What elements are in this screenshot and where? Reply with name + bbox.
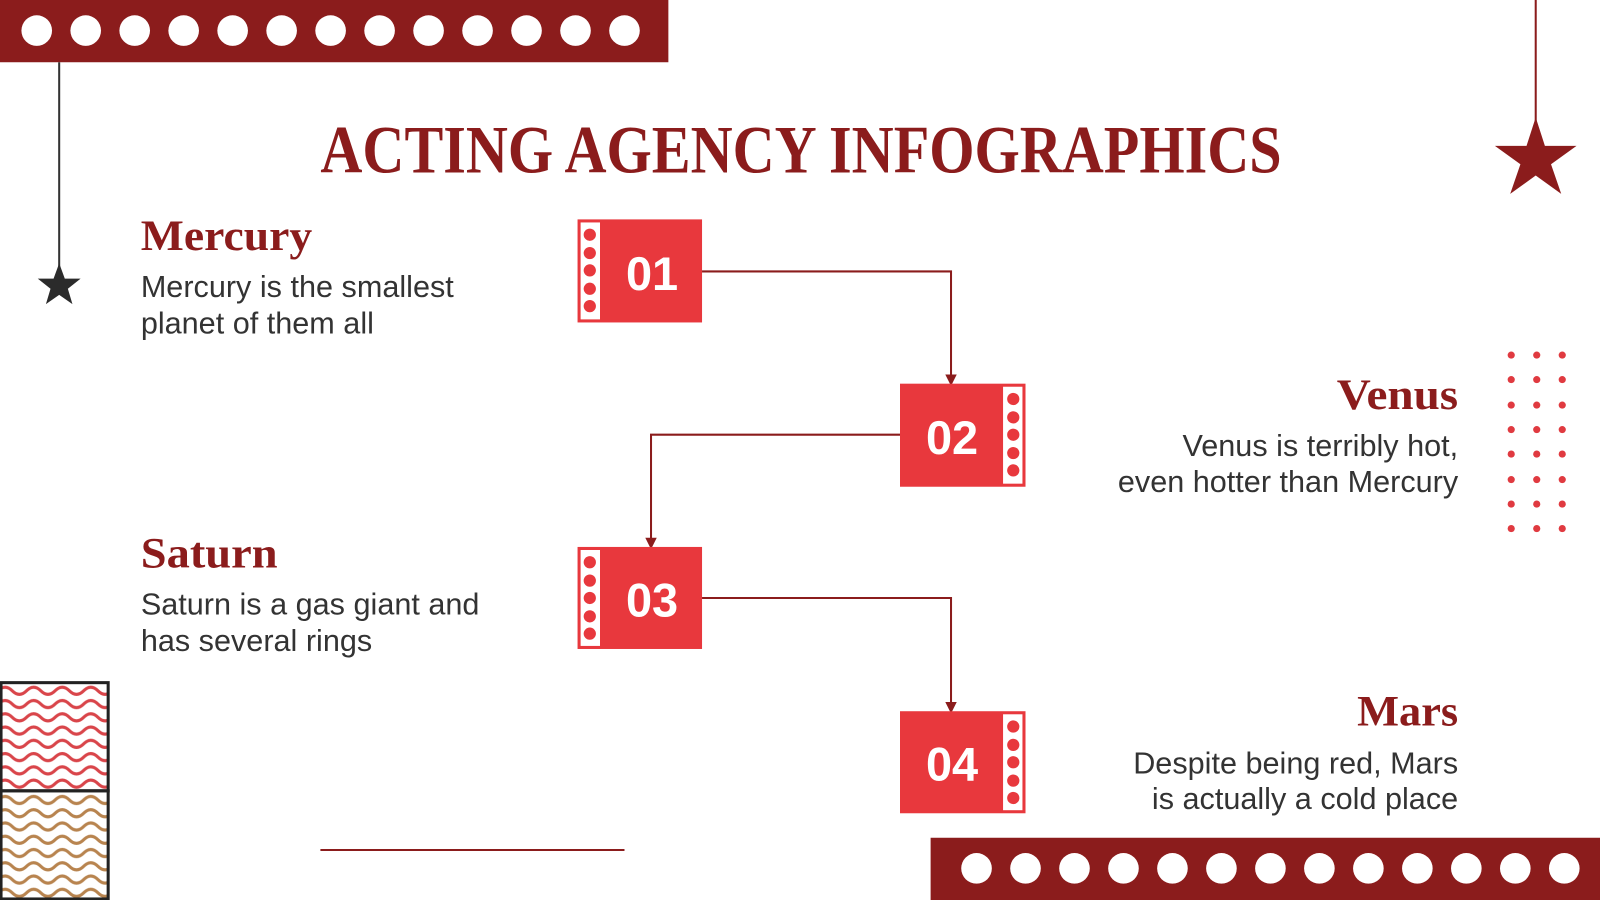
ticket 04 <box>900 711 1026 813</box>
wave pattern blocks <box>1 683 108 899</box>
dot grid decoration <box>1508 352 1566 532</box>
text block: Mercury: Mercury <box>141 213 312 260</box>
text block: Venus: Venus is terribly hot, <box>1183 429 1458 463</box>
bottom dotted banner <box>931 838 1600 900</box>
ticket 02: 02 <box>926 412 978 464</box>
ticket 03 <box>578 547 702 649</box>
text block: Mars: is actually a cold place <box>1152 782 1458 816</box>
ticket 01 <box>578 219 702 322</box>
text block: Venus: Venus <box>1337 372 1458 419</box>
top dotted banner <box>0 0 668 62</box>
text block: Saturn: has several rings <box>141 624 372 658</box>
ticket 02 <box>900 384 1026 487</box>
text block: Mercury: planet of them all <box>141 307 374 341</box>
ticket 04: 04 <box>926 739 978 791</box>
text block: Mars: Mars <box>1357 689 1458 736</box>
arrow: 02 to 03 <box>647 435 900 547</box>
text block: Mercury <box>141 213 454 341</box>
arrow: 01 to 02 <box>702 271 955 384</box>
text block: Venus <box>1118 372 1459 499</box>
text block: Saturn: Saturn is a gas giant and <box>141 587 479 621</box>
icon: hanging star left <box>38 62 81 304</box>
text block: Mars: Despite being red, Mars <box>1133 746 1458 780</box>
icon: hanging star right <box>1495 0 1577 194</box>
text block: Saturn <box>141 530 479 658</box>
text block: Mars <box>1133 689 1458 816</box>
text block: Mercury: Mercury is the smallest <box>141 270 454 304</box>
ticket 01: 01 <box>626 248 678 300</box>
ticket 03: 03 <box>626 574 678 626</box>
text block: Saturn: Saturn <box>141 530 278 577</box>
text block: Venus: even hotter than Mercury <box>1118 465 1459 499</box>
title: ACTING AGENCY INFOGRAPHICS <box>320 112 1282 187</box>
arrow: 03 to 04 <box>702 598 955 711</box>
